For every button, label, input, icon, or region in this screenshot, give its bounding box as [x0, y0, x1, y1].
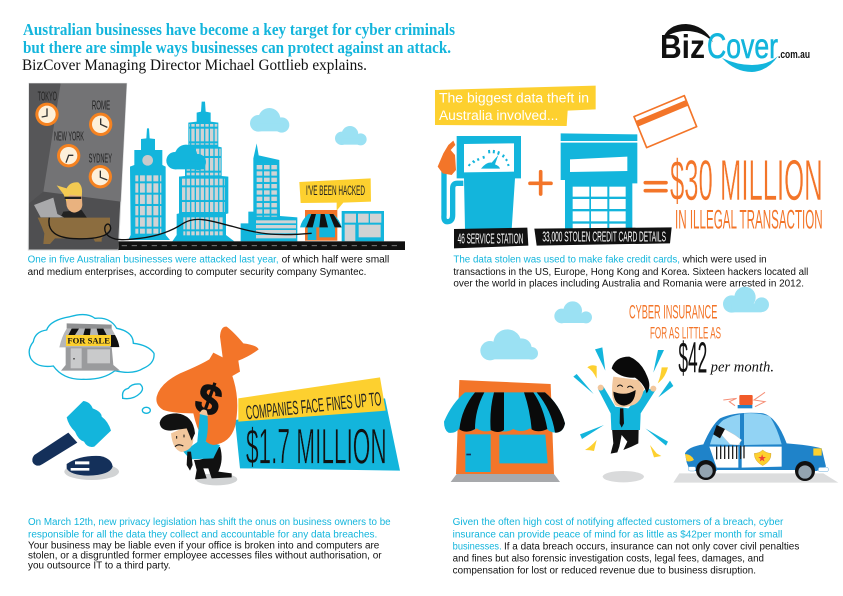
panel: hacker and city: TOKYO [38, 89, 57, 103]
icon: fuel pump [438, 136, 521, 229]
title: Australian businesses have become a key target for cyber criminals [23, 20, 456, 39]
hacker at desk [34, 182, 110, 244]
text: $1.7 MILLION [246, 418, 387, 474]
icon: credit card [634, 96, 697, 148]
cloud: light blue [250, 108, 289, 133]
blue stat banner [235, 398, 400, 471]
caption: privacy legislation: you outsource IT to a third party. [28, 561, 171, 572]
caption: cyber insurance: compensation for lost or reduced revenue due to business disruption. [453, 565, 756, 576]
label: 46 service station [454, 228, 528, 248]
caption: attacks [28, 255, 389, 278]
caption: cyber insurance: If a data breach occurs, insurance can not only cover civil penalties [504, 541, 799, 552]
panel: hacker and city: SYDNEY [89, 152, 112, 166]
man carrying money bag [156, 327, 259, 485]
cloud: dark blue [166, 145, 206, 170]
shop: grey windows [342, 211, 384, 241]
caption: stolen data: transactions in the US, Europe, Hong Kong and Korea. Sixteen hackers located all [453, 267, 808, 278]
caption: cyber insurance: businesses. [453, 541, 502, 552]
panel: fines [29, 315, 400, 485]
caption: attacks: of which half were small [282, 255, 389, 266]
title: but there are simple ways businesses can protect against an attack. [23, 38, 451, 57]
jumping man [598, 357, 656, 454]
logo: BizCover: Biz [660, 28, 705, 65]
panel: cyber insurance: $42 [678, 335, 707, 383]
panel: cyber insurance: FOR AS LITTLE AS [650, 323, 721, 342]
logo: BizCover: .com.au [778, 49, 810, 61]
caption: attacks: One in five Australian businesses were attacked last year, [28, 255, 279, 266]
caption: stolen data: over the world in places including Australia and Romania were arrested in 2012. [453, 279, 804, 290]
thought cloud [29, 315, 154, 413]
shadow under jumping man [603, 471, 644, 482]
panel: cyber insurance: CYBER INSURANCE [629, 302, 717, 323]
shop for sale: FOR SALE [67, 336, 110, 346]
banner [435, 86, 596, 126]
cloud: small light blue [335, 126, 367, 145]
hacker room wall [28, 83, 127, 250]
caption: privacy legislation: responsible for all the data they collect and accountable for any data breaches. [28, 529, 377, 540]
clock: Rome: ROME [92, 99, 110, 113]
panel: hacker and city [28, 83, 405, 278]
burst lines [573, 347, 673, 457]
clouds [480, 287, 769, 360]
clock: Tokyo [35, 89, 59, 126]
caption: cyber insurance [453, 517, 799, 576]
caption: stolen data: which were used in [682, 255, 767, 266]
logo: BizCover [660, 24, 810, 72]
caption: cyber insurance: and fines but also forensic investigation costs, legal fees, damages, and [453, 553, 764, 564]
caption: stolen data: The data stolen was used to make fake credit cards, [453, 255, 680, 266]
panel: biggest data theft: 33,000 STOLEN CREDIT CARD DETAILS [542, 229, 666, 246]
stat: per month: per month. [710, 360, 774, 376]
building: tall tower [172, 102, 234, 241]
police car: ★ [758, 454, 767, 465]
shop: awning storefront [300, 210, 342, 241]
hacker network cable [49, 218, 312, 240]
road [118, 241, 405, 250]
icon: gavel [32, 401, 119, 480]
clock: Rome [89, 99, 112, 136]
caption: cyber insurance: insurance can provide peace of mind for as little as $42per month for small [453, 529, 782, 540]
logo: BizCover: Cover [707, 27, 778, 66]
panel: biggest data theft [435, 86, 823, 290]
panel: fines: COMPANIES FACE FINES UP TO [245, 389, 382, 424]
caption: privacy legislation: Your business may be liable even if your office is broken into and computers are [28, 541, 380, 552]
equals sign [645, 183, 666, 191]
panel: biggest data theft: 46 SERVICE STATION [458, 230, 523, 247]
caption: privacy legislation: On March 12th, new privacy legislation has shift the onus on business owners to be [28, 517, 391, 528]
caption: cyber insurance: Given the often high cost of notifying affected customers of a breach, cyber [453, 517, 784, 528]
panel: hacker and city: NEW YORK [54, 130, 84, 144]
caption: privacy legislation: stolen, or a disgruntled former employee accesses files without authorisation, or [28, 551, 382, 562]
man carrying money bag: $ [189, 374, 228, 427]
clock: Sydney [89, 152, 112, 188]
caption: stolen data [453, 255, 808, 290]
banner: Australia involved... [439, 108, 558, 123]
panel: cyber insurance [444, 287, 838, 483]
speech bubble: I've been hacked [299, 178, 371, 211]
caption: attacks: and medium enterprises, according to computer security company Symantec. [28, 267, 366, 278]
icon: card terminal [561, 133, 637, 230]
shop for sale [59, 323, 120, 371]
building: office block [241, 143, 297, 241]
icon: shop [444, 380, 565, 482]
title [22, 20, 456, 74]
banner: The biggest data theft in [439, 91, 589, 106]
plus sign [530, 172, 551, 194]
building: clock tower [128, 128, 170, 240]
speech bubble: I've been hacked: I'VE BEEN HACKED [306, 182, 365, 198]
caption: privacy legislation [28, 517, 391, 572]
police car [673, 392, 838, 483]
label: 33,000 stolen credit card details [534, 227, 672, 246]
title: BizCover Managing Director Michael Gottlieb explains. [22, 57, 367, 74]
yellow stat banner [238, 377, 386, 424]
clock: New York [54, 130, 84, 167]
